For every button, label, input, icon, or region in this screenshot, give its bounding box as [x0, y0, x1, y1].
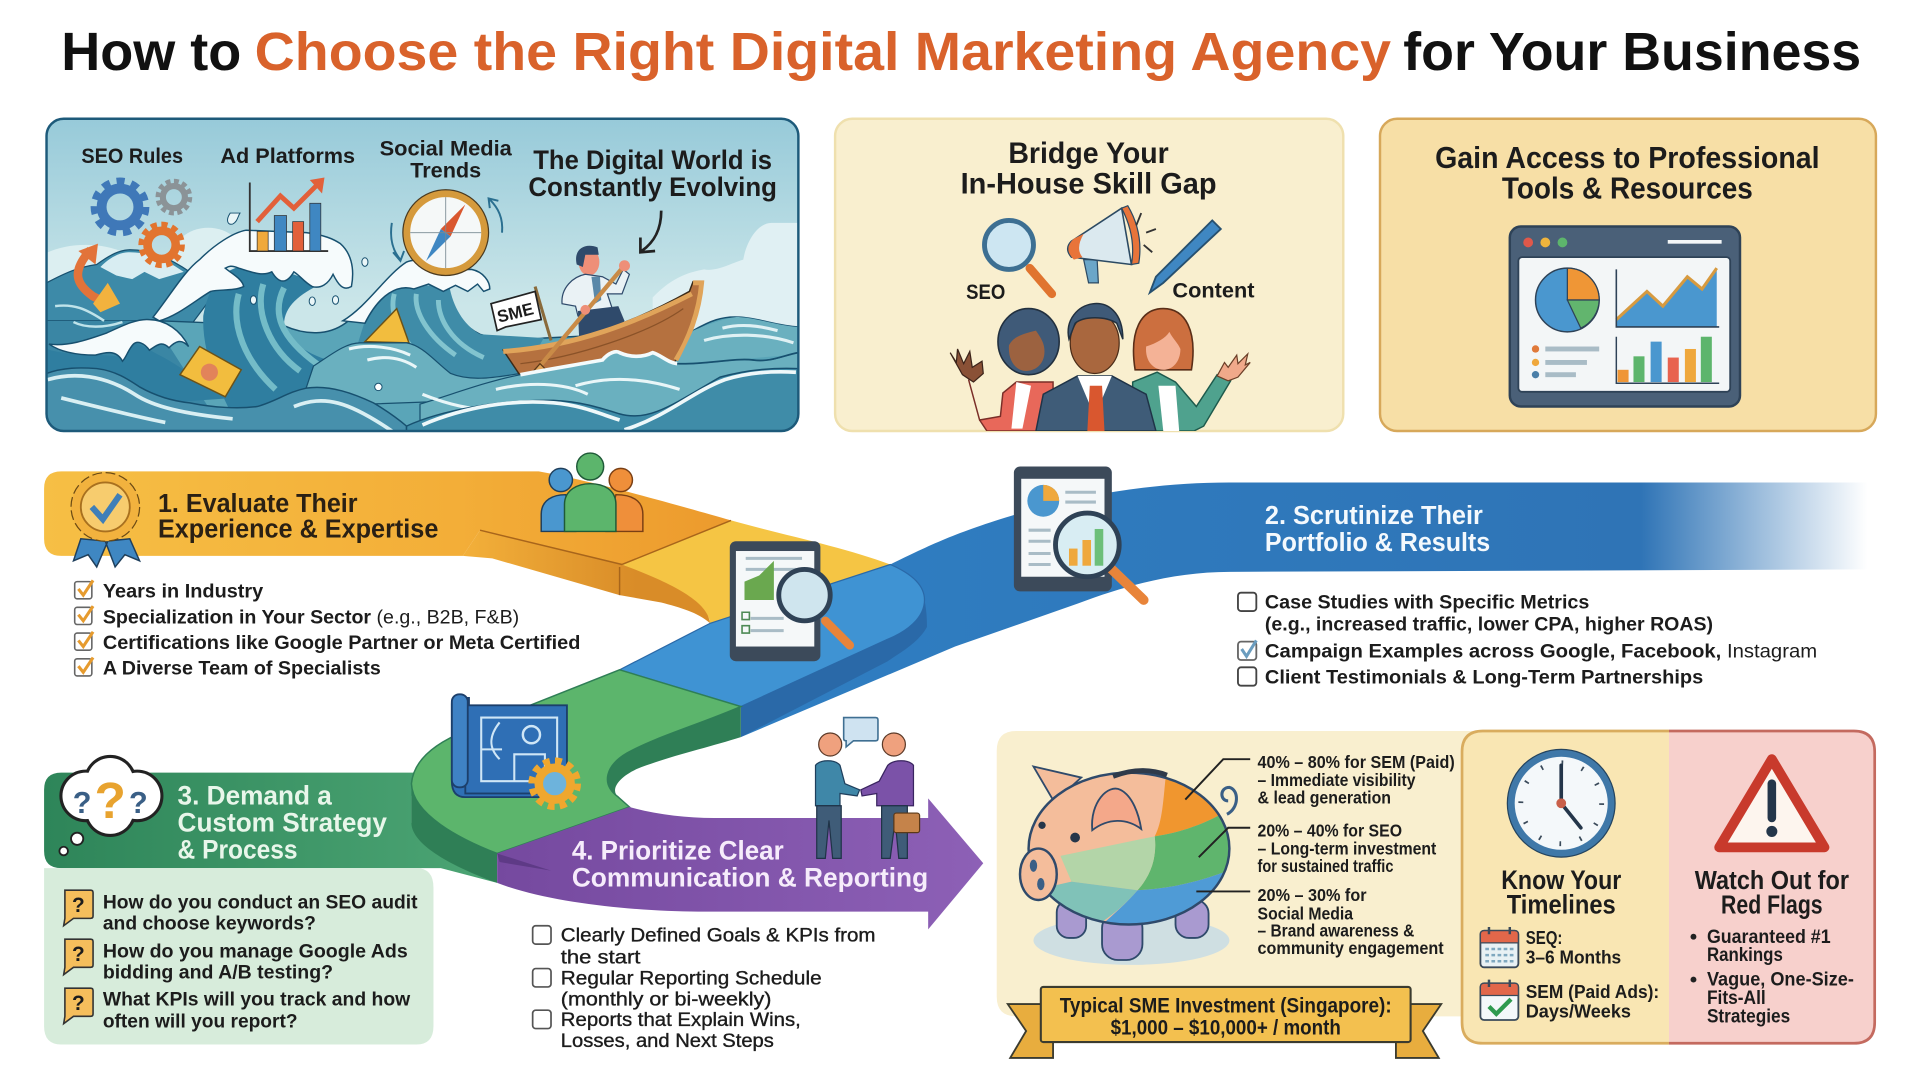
heading: know your timelines: Timelines [1507, 889, 1616, 919]
callout: SEO: 20% – 40% for SEO [1258, 820, 1402, 840]
heading: bridge your skill gap [961, 137, 1217, 200]
panel: questions to ask [44, 868, 433, 1044]
heading: professional tools [1435, 141, 1820, 205]
chart: journey path ribbon [44, 471, 1867, 929]
check item: Clearly Defined Goals & KPIs from [561, 925, 876, 947]
icon: clock [1507, 749, 1615, 857]
icon: SME boat with rower [491, 246, 703, 384]
title: for Your Business [1403, 22, 1861, 82]
heading: bridge your skill gap: Bridge Your [1008, 137, 1169, 170]
question item: ? [72, 943, 85, 966]
step 1 banner [44, 471, 731, 564]
callout: SME investment banner: Typical SME Investment (Singapore): [1060, 995, 1392, 1018]
callout: SEM paid: – Immediate visibility [1258, 770, 1416, 790]
timeline: SEM [1480, 980, 1659, 1022]
callout: SME investment banner: $1,000 – $10,000+ / month [1111, 1017, 1341, 1040]
check item [533, 967, 822, 1010]
heading: know your timelines: Know Your [1501, 865, 1622, 895]
check item: Certifications like Google Partner or Meta Certified [103, 632, 580, 654]
check item [533, 925, 876, 969]
step 2 checklist [1238, 592, 1817, 688]
question item [64, 988, 411, 1032]
icon: gears [94, 181, 190, 265]
heading: digital world: Constantly Evolving [528, 172, 777, 202]
icon: thought cloud: ? [129, 786, 148, 820]
callout: social media [1196, 885, 1444, 958]
callout: social media: community engagement [1258, 938, 1444, 958]
list: red flags: Guaranteed #1 [1707, 927, 1831, 948]
check item: Specialization in Your Sector (e.g., B2B, F&B) [103, 606, 519, 628]
callout: SEO [1199, 820, 1437, 876]
check item: the start [561, 947, 641, 969]
icon: thought cloud: ? [73, 786, 91, 820]
question item: ? [72, 894, 85, 917]
icon: magnifier [984, 220, 1052, 294]
icon: analytics dashboard [1510, 227, 1740, 407]
callout: SEM paid [1185, 752, 1455, 807]
callout: SME investment banner [1008, 987, 1441, 1058]
icon: warning triangle [1719, 759, 1824, 847]
text: SEO: SEO [966, 281, 1005, 304]
heading: step 1: 1. Evaluate Their [158, 490, 358, 518]
heading: Social Media Trends: Trends [410, 160, 481, 183]
callout: SEM paid: & lead generation [1258, 787, 1391, 807]
heading: step 2: 2. Scrutinize Their [1265, 502, 1483, 530]
heading: digital world [528, 145, 777, 202]
man centre [1036, 304, 1156, 431]
callout: SEO: – Long-term investment [1258, 839, 1437, 859]
list: red flags: Strategies [1707, 1006, 1790, 1027]
heading: red flags [1695, 867, 1849, 919]
heading: step 2: Portfolio & Results [1265, 529, 1490, 557]
panel: bridge skill gap [835, 119, 1343, 431]
heading: step 4: 4. Prioritize Clear [572, 836, 784, 866]
icon: thought cloud: ? [95, 771, 126, 829]
question item [64, 890, 418, 934]
question item [64, 939, 408, 983]
check item: A Diverse Team of Specialists [103, 658, 381, 680]
icon: folder in wave [180, 347, 241, 397]
icon: megaphone [1068, 206, 1156, 283]
step 4 arrow [497, 798, 983, 929]
arrow: to the boat [640, 211, 661, 252]
callout: social media: Social Media [1258, 904, 1353, 924]
heading: step 3: 3. Demand a [178, 780, 333, 810]
timeline: SEO: SEQ: [1526, 927, 1562, 948]
chart: ad platforms bars [250, 178, 328, 251]
heading: step 1: Experience & Expertise [158, 516, 438, 544]
heading: SEO Rules: SEO Rules [81, 145, 183, 168]
title: How to [61, 22, 241, 82]
heading: step 4 [572, 836, 928, 893]
check item: Regular Reporting Schedule [561, 967, 822, 989]
title: Choose the Right Digital Marketing Agency [255, 22, 1391, 82]
question item: What KPIs will you track and how [103, 988, 411, 1010]
step 2 ribbon [741, 482, 1867, 737]
check item: (e.g., increased traffic, lower CPA, higher ROAS) [1265, 614, 1713, 636]
bar chart [1616, 337, 1719, 383]
check item: Reports that Explain Wins, [561, 1009, 801, 1031]
question item: and choose keywords? [103, 912, 316, 934]
icon: compass [403, 190, 489, 276]
text: Content: Content [1172, 280, 1255, 303]
heading: step 4: Communication & Reporting [572, 863, 928, 893]
callout: SEM paid: 40% – 80% for SEM (Paid) [1258, 752, 1455, 772]
heading: Social Media Trends: Social Media [380, 138, 512, 161]
icon: team [541, 453, 643, 531]
check item: Case Studies with Specific Metrics [1265, 592, 1589, 614]
check item: Years in Industry [103, 581, 263, 603]
heading: red flags: Watch Out for [1695, 867, 1849, 895]
check item [1238, 592, 1713, 636]
callout: social media: 20% – 30% for [1258, 885, 1367, 905]
list: red flags: Rankings [1707, 945, 1783, 966]
heading: step 3: & Process [178, 834, 298, 864]
question item: How do you conduct an SEO audit [103, 892, 418, 914]
check item: Losses, and Next Steps [561, 1030, 774, 1052]
step 3 banner [44, 773, 497, 883]
list: red flags: Fits-All [1707, 988, 1766, 1009]
heading: Social Media Trends [380, 138, 512, 183]
heading: professional tools: Tools & Resources [1502, 171, 1753, 205]
heading: bridge your skill gap: In-House Skill Gap [961, 167, 1217, 200]
icon: piggy bank [1020, 765, 1237, 965]
heading: know your timelines [1501, 865, 1622, 919]
icon: SME boat with rower: SME [495, 298, 536, 327]
heading: Ad Platforms: Ad Platforms [220, 145, 355, 168]
question item: often will you report? [103, 1010, 298, 1032]
heading: step 3 [178, 780, 387, 864]
question item: bidding and A/B testing? [103, 961, 333, 983]
title [61, 22, 1861, 82]
question item: ? [72, 992, 85, 1015]
timeline: SEM: Days/Weeks [1526, 1001, 1631, 1022]
panel: budget allocation [997, 731, 1482, 1058]
icon: blueprint [452, 694, 577, 806]
check item: Campaign Examples across Google, Facebook, Instagram [1265, 641, 1817, 663]
pie chart [1536, 268, 1599, 332]
icon: team of three [950, 304, 1250, 431]
check item [533, 1009, 801, 1052]
list: red flags: Vague, One-Size- [1707, 970, 1854, 991]
question item: How do you manage Google Ads [103, 941, 408, 963]
heading: red flags: Red Flags [1721, 891, 1823, 919]
icon: pen [1150, 220, 1221, 293]
heading: digital world: The Digital World is [533, 145, 772, 175]
list: red flags [1691, 927, 1854, 1027]
callout: SEO: for sustained traffic [1258, 856, 1394, 876]
arrow: around compass left [391, 223, 404, 261]
check item: Client Testimonials & Long-Term Partnerships [1265, 666, 1703, 688]
check item: (monthly or bi-weekly) [561, 988, 771, 1010]
woman right [1133, 309, 1250, 431]
panel: digital world ocean [31, 119, 802, 431]
callout: social media: – Brand awareness & [1258, 921, 1414, 941]
icon: handshake people [816, 718, 920, 858]
icon: warning triangle in wave [365, 309, 409, 343]
icon: certified rosette [71, 473, 140, 567]
panel: professional tools [1380, 119, 1876, 431]
step 4 checklist [533, 925, 876, 1052]
icon: portfolio tablet [1014, 467, 1144, 600]
icon: tablet report [730, 541, 850, 661]
icon: sinking arrow [78, 250, 103, 301]
timeline: SEO [1480, 927, 1621, 968]
timeline: SEO: 3–6 Months [1526, 947, 1621, 968]
woman left [950, 309, 1059, 431]
timeline: SEM: SEM (Paid Ads): [1526, 981, 1659, 1002]
heading: step 2 [1265, 502, 1490, 557]
step 1 checklist [75, 580, 580, 680]
panel: timelines and red flags [1461, 730, 1876, 1044]
icon: thought cloud [59, 757, 162, 855]
heading: step 1 [158, 490, 438, 544]
heading: professional tools: Gain Access to Professional [1435, 141, 1820, 175]
arrow: around compass right [489, 198, 502, 233]
area chart [1616, 268, 1719, 327]
heading: step 3: Custom Strategy [178, 807, 387, 837]
